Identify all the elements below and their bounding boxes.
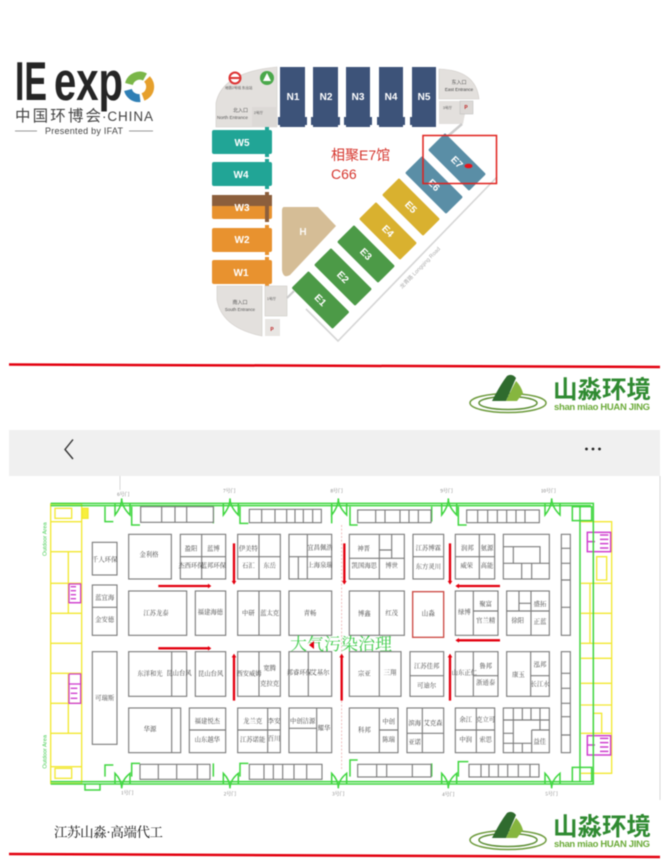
booth names left: 盈阳: [185, 543, 197, 552]
halls N1 to N5: N3: [352, 92, 365, 103]
south entrance: [217, 286, 294, 336]
booth names right: 聚富: [479, 599, 493, 608]
logo: IE expo China: ·CHINA: [102, 109, 153, 124]
magenta stairs right: [587, 532, 611, 755]
road: Longqing Road: 龙青路 Longqing Road: [398, 245, 442, 290]
booth names left: 龙兰克: [243, 716, 263, 725]
booth names right: 红茂: [385, 608, 399, 617]
booth names right: 浙通泰: [476, 677, 496, 686]
gate labels left: 1号门: [121, 790, 134, 797]
booth names right: 余江: [459, 715, 473, 724]
booth names left: 金安德: [95, 615, 115, 624]
booth names right: 艾克森: [424, 718, 443, 727]
gate labels right: 10号门: [541, 488, 556, 495]
logo: IE expo China: [15, 50, 153, 136]
divider: bottom red line: [9, 854, 660, 857]
gate labels right: 4号门: [442, 791, 455, 798]
halls E1 to E7: [292, 133, 486, 329]
east entrance: East Entrance: [445, 87, 474, 92]
south entrance: 1号厅: [267, 296, 276, 301]
booth names left: 克拉克: [260, 679, 280, 688]
booth names right: 江苏佳邦: [414, 661, 440, 670]
logo: Shanmiao bottom: shan miao HUAN JING: [554, 839, 650, 850]
halls E1 to E7: E5: [402, 199, 419, 216]
logo: Shanmiao bottom: [470, 812, 651, 850]
north entrance: [216, 67, 277, 127]
logo: IE expo China: 中国环博会: [15, 107, 101, 125]
panel: floor plan of hall E7: [42, 487, 612, 798]
booth names left: 蓝宜海: [95, 592, 115, 601]
halls N1 to N5: N2: [320, 92, 333, 103]
logo: Shanmiao bottom: 山淼环境: [553, 813, 651, 841]
halls N1 to N5: N1: [287, 92, 300, 103]
hall H: [282, 207, 336, 276]
booth names left: 福建海德: [198, 607, 224, 616]
logo: IE expo China: Presented by IFAT: [45, 126, 124, 136]
halls E1 to E7: E4: [379, 223, 396, 240]
booth names right: 三翔: [384, 668, 397, 677]
road: Longqing Road: [306, 177, 497, 341]
north entrance: 地铁2号线 东出站: [225, 85, 253, 90]
booth names left: 西安威姆: [236, 668, 262, 677]
booth names left: 上海泉瑞: [307, 560, 333, 569]
booth names left: 青畅: [304, 608, 317, 617]
magenta stairs left: [69, 584, 81, 703]
halls W1 to W5: W4: [234, 170, 249, 181]
booth names left: 杰西环保: [178, 560, 204, 569]
slogan text: 江苏山淼·高端代工: [54, 824, 163, 840]
booth names right: 索思: [479, 734, 493, 743]
booth names right: 凯国海思: [352, 560, 378, 569]
east entrance: 3号厅: [443, 105, 452, 110]
halls N1 to N5: N4: [385, 92, 398, 103]
booth names right: 高能: [481, 560, 493, 569]
booth names right: 山东正仁: [452, 668, 478, 677]
halls N1 to N5: N5: [418, 92, 431, 103]
booth names right: 润邦: [461, 543, 474, 552]
booth names right: 官兰精: [476, 615, 496, 624]
booth names right: 长江水: [531, 679, 550, 688]
booth names left: 宽腾: [263, 663, 277, 672]
booth names right: 亚诺: [408, 737, 422, 746]
halls E1 to E7: E3: [357, 246, 374, 263]
booth names left: 李安: [268, 716, 281, 725]
booth names right: 绿博: [458, 607, 471, 616]
gate labels left: 7号门: [223, 487, 236, 494]
booth names left: 蓝太克: [260, 608, 280, 617]
booth names left: 山东越华: [195, 735, 221, 744]
green frame and doors left: [51, 498, 335, 790]
logo: IE expo China: IE: [15, 50, 47, 112]
booth names right: 博世: [385, 560, 399, 569]
booth names left: 福建悦杰: [195, 716, 221, 725]
left service rooms in yellow: [51, 504, 88, 783]
booth names right: 鲁邦: [479, 661, 493, 670]
red flow arrows right: [339, 543, 500, 701]
highlighted booth: Shanmiao: [413, 592, 444, 637]
booth names left: [92, 542, 333, 744]
floor plan left half: [42, 487, 335, 797]
icon: more dots: [585, 448, 601, 450]
halls E1 to E7: E6: [425, 177, 442, 194]
booth names left: 耀华: [318, 723, 331, 732]
red flow arrows left: [158, 543, 236, 701]
decorative screen edge: [120, 476, 660, 800]
floor plan right half: [330, 488, 612, 798]
halls W1 to W5: W1: [234, 268, 249, 279]
booth names right: 康玉: [512, 670, 525, 679]
outdoor area labels: Outdoor Area: [42, 522, 48, 556]
booth names left: 东岳: [263, 560, 277, 569]
booth names right: 东方灵川: [416, 562, 441, 571]
right service rooms in yellow: [581, 522, 612, 773]
booth names left: 江苏龙泰: [143, 608, 169, 617]
booth names left: 伊美特: [239, 543, 258, 552]
halls E1 to E7: E2: [334, 269, 351, 286]
booth names right: [352, 543, 550, 746]
gate labels left: 2号门: [224, 790, 236, 797]
halls E1 to E7: E7: [448, 154, 465, 171]
booth names right: 中润: [459, 734, 473, 743]
zone label: air pollution treatment: 大气污染治理: [290, 635, 392, 654]
booth names left: 宜昌佩浩: [307, 542, 333, 551]
booth names left: 蓝邦环保: [201, 560, 227, 569]
booth names left: 东洋和光: [137, 669, 163, 678]
callout text: booth location: 相聚E7馆: [331, 147, 390, 163]
callout: red box and booth marker: [423, 136, 496, 184]
icon: tri-colour ring: [128, 76, 150, 98]
north entrance: 2号厅: [254, 110, 263, 115]
highlighted booth: Shanmiao: 山淼: [422, 608, 435, 617]
booth names left: 中研: [242, 608, 255, 617]
booth names left: 中创洁源: [290, 716, 316, 725]
booth names right: 克立可: [476, 715, 496, 724]
north entrance: North Entrance: [217, 115, 248, 120]
map: exhibition venue halls: [212, 67, 497, 341]
booth names left: 百川: [268, 733, 280, 742]
halls W1 to W5: W5: [234, 138, 250, 149]
booth names right: 滨海: [408, 718, 422, 727]
booth names left: 千人环保: [92, 554, 118, 563]
halls W1 to W5: W3: [234, 203, 250, 214]
booth names left: 华源: [144, 724, 157, 733]
gate labels left: [117, 487, 236, 797]
icon: back chevron: [65, 440, 73, 459]
logo: Shanmiao top: 山淼环境: [553, 376, 651, 404]
hall H: H: [299, 227, 307, 238]
booth names left: 江苏诺能: [240, 735, 265, 744]
booth names right: 宗亚: [358, 668, 371, 677]
booth names left: 昆山台风: [198, 668, 224, 677]
halls W1 to W5: W2: [234, 235, 250, 246]
south entrance: 南入口: [232, 299, 248, 306]
gate labels right: 9号门: [440, 488, 453, 495]
booth names right: 科邦: [358, 725, 371, 734]
divider: top red line: [9, 364, 660, 367]
panel: phone title bar: [9, 430, 660, 476]
booth names right: 徐阳: [511, 616, 524, 625]
callout text: booth location: C66: [331, 166, 357, 182]
gate labels right: 5号门: [545, 790, 558, 797]
halls E1 to E7: E1: [312, 292, 328, 309]
booth names left: 蓝博: [207, 543, 220, 552]
booth names left: 昆山台风: [166, 668, 192, 677]
booth names right: 氨源: [481, 543, 494, 552]
east entrance: 东入口: [451, 79, 467, 86]
booths left: [92, 507, 332, 779]
booth names left: 可瑞斯: [95, 693, 115, 702]
north entrance: 北入口: [233, 107, 248, 114]
booths right: [349, 510, 570, 777]
booth names right: 博鑫: [358, 608, 371, 617]
halls W1 to W5: [212, 127, 272, 287]
south entrance: South Entrance: [225, 307, 256, 312]
booth names left: 石汇: [242, 561, 255, 569]
gate labels right: [330, 488, 558, 798]
green frame and doors right: [332, 498, 593, 788]
east entrance: [439, 69, 479, 136]
callout text: booth location: [331, 147, 390, 182]
booth names left: 艾基尔: [311, 668, 330, 677]
booth names right: 可迪尔: [417, 680, 437, 689]
booth names right: 盛拓: [534, 599, 547, 608]
booth names right: 中创: [382, 716, 395, 725]
booth names right: 泓邦: [534, 660, 547, 669]
logo: Shanmiao top: [470, 375, 651, 413]
booth names right: 威荣: [460, 560, 474, 569]
gate labels left: 6号门: [117, 491, 130, 498]
booth names left: 邦睿环保: [287, 668, 313, 677]
gate labels right: 8号门: [330, 488, 343, 495]
east entrance: P: [464, 105, 468, 111]
outdoor area labels: Outdoor Area: [42, 734, 48, 769]
booth names left: 金利格: [140, 549, 159, 558]
booth names right: 陈瑞: [382, 734, 396, 743]
logo: Shanmiao top: shan miao HUAN JING: [554, 402, 650, 413]
gate labels right: 3号门: [332, 790, 345, 797]
booth names right: 江苏博霖: [416, 543, 442, 552]
outdoor area labels: [42, 522, 48, 769]
halls N1 to N5: [278, 67, 436, 127]
booth names right: 益佳: [533, 737, 547, 746]
south entrance: P: [270, 327, 274, 333]
logo: IE expo China: exp: [54, 50, 123, 112]
booth names right: 神晋: [357, 543, 371, 552]
booth names right: 正蓝: [534, 616, 547, 625]
